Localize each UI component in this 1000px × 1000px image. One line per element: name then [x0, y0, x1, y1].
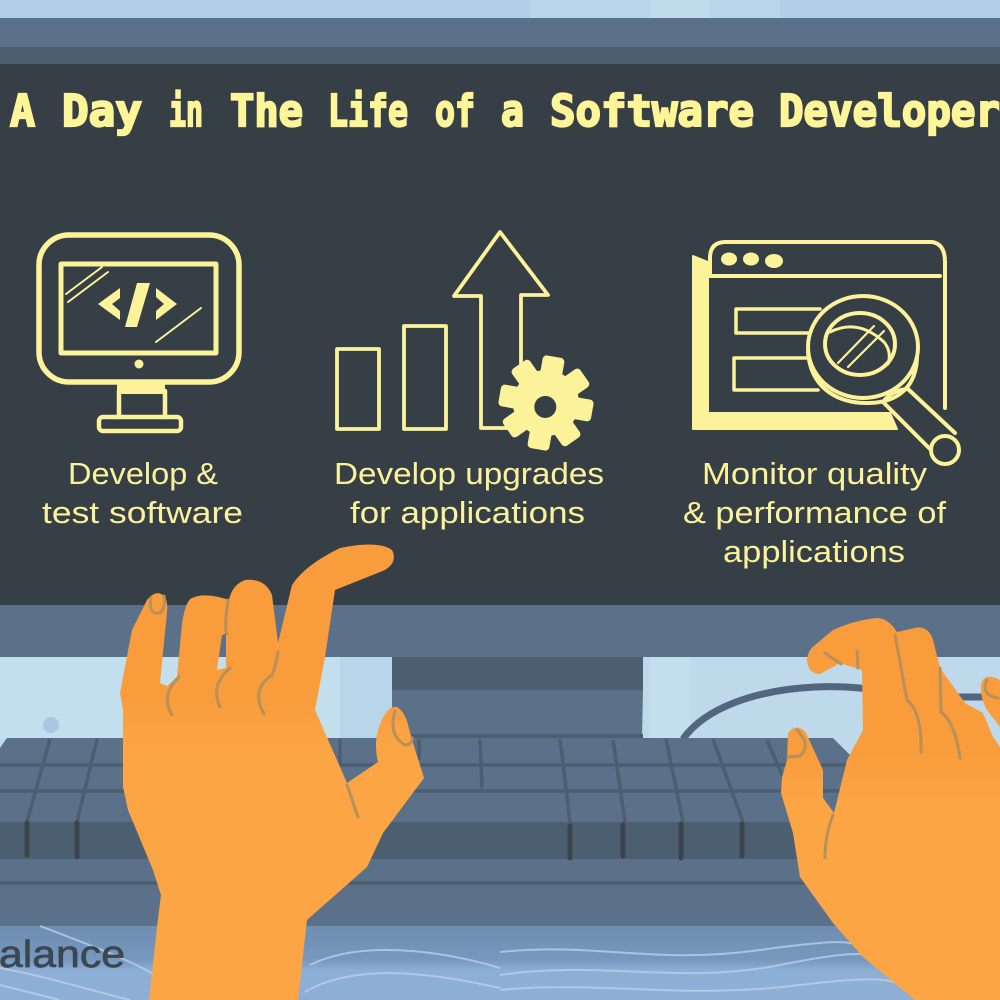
code symbol [98, 283, 177, 327]
knuckle and nail lines [150, 596, 412, 817]
caption: develop upgrades: for applications [350, 495, 585, 530]
caption: monitor quality: applications [723, 534, 905, 569]
window behind monitor [0, 657, 1000, 800]
title: Life [328, 86, 408, 137]
caption: monitor quality: Monitor quality [702, 456, 928, 491]
right hand [781, 618, 1000, 1000]
wooden desk [0, 926, 1000, 1000]
caption: monitor quality [683, 456, 946, 569]
title: in [169, 86, 203, 137]
title: Day [62, 86, 142, 137]
keyboard [0, 738, 900, 926]
caption: develop upgrades [334, 456, 604, 530]
caption: develop and test: Develop & [68, 456, 218, 491]
monitor top bezel [0, 18, 1000, 64]
monitor stand [392, 657, 643, 738]
left hand [120, 544, 424, 1000]
logo text: alance [0, 934, 125, 976]
background wall [0, 0, 1000, 18]
knuckle and nail lines [788, 635, 998, 858]
title: Software [550, 86, 754, 137]
monitor lower bezel [0, 605, 1000, 657]
title: The [230, 86, 303, 137]
key gaps [27, 823, 742, 858]
caption: develop and test [42, 456, 243, 530]
magnifier [808, 296, 959, 464]
gear [492, 349, 600, 457]
title: a [501, 86, 524, 137]
caption: develop and test: test software [42, 495, 243, 530]
icon: browser window with magnifier [693, 242, 959, 464]
monitor screen panel [0, 64, 1000, 605]
caption: develop upgrades: Develop upgrades [334, 456, 604, 491]
pinky finger [981, 677, 1000, 727]
cable [683, 687, 990, 739]
icon: growth bars, arrow and gear [337, 232, 600, 457]
title [10, 86, 1000, 137]
icon: computer monitor with code [39, 235, 239, 431]
title: of [435, 86, 475, 137]
caption: monitor quality: & performance of [683, 495, 946, 530]
title: A [10, 86, 35, 137]
